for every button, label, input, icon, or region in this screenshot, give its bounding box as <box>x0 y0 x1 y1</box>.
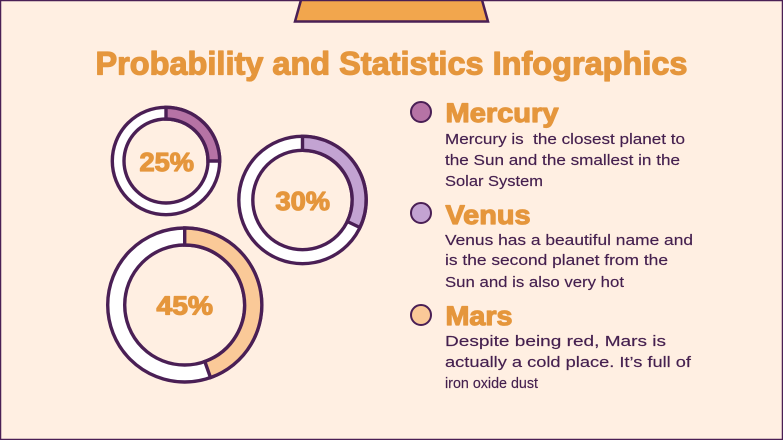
text: Mars description <box>445 334 692 392</box>
text: Mars description: actually a cold place. It’s full of <box>445 355 692 371</box>
legend: Mars <box>411 301 692 392</box>
text: Mars description: iron oxide dust <box>445 376 538 392</box>
donut chart: 45% <box>108 228 262 382</box>
text: Venus description <box>445 233 693 291</box>
text: Mars description: Despite being red, Mars is <box>445 334 666 350</box>
donut chart: 25% <box>112 107 220 215</box>
label: 45%: 45% <box>156 290 213 320</box>
icon: Mercury dot <box>411 102 431 122</box>
heading: Venus: Venus <box>446 200 530 230</box>
title: Probability and Statistics Infographics <box>96 46 688 82</box>
label: 30%: 30% <box>276 186 330 216</box>
text: Mercury description <box>445 132 685 190</box>
legend: Venus <box>411 200 693 291</box>
donut chart: 30% <box>239 136 366 264</box>
top tab <box>295 0 488 22</box>
heading: Mars: Mars <box>446 301 512 331</box>
text: Venus description: Venus has a beautiful name and <box>445 233 693 249</box>
text: Mercury description: Mercury is the closest planet to <box>445 132 685 148</box>
text: Venus description: Sun and is also very hot <box>445 275 624 291</box>
heading: Mercury: Mercury <box>446 98 558 128</box>
text: Mercury description: the Sun and the smallest in the <box>445 153 680 169</box>
legend: Mercury <box>411 98 685 190</box>
icon: Venus dot <box>411 203 431 223</box>
text: Mercury description: Solar System <box>445 174 543 190</box>
label: 25%: 25% <box>140 147 194 177</box>
text: Venus description: is the second planet from the <box>445 253 668 269</box>
icon: Mars dot <box>411 305 431 325</box>
